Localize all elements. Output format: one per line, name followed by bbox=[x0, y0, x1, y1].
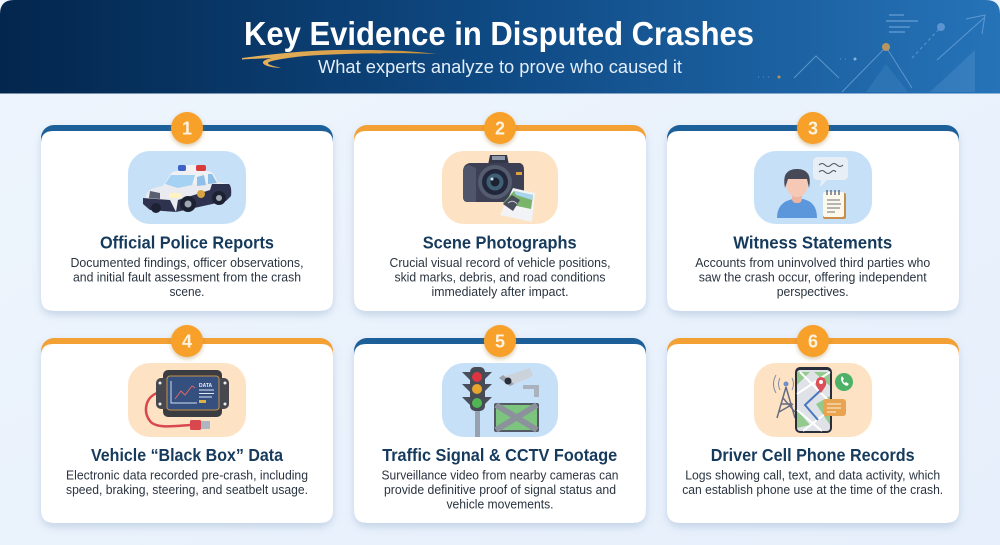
description bbox=[382, 469, 619, 512]
icon: camera and photo bbox=[442, 151, 558, 224]
description: and initial fault assessment from the crash bbox=[73, 270, 301, 284]
description: Accounts from uninvolved third parties who bbox=[695, 256, 930, 270]
description bbox=[695, 256, 930, 299]
icon: witness with speech bubble bbox=[754, 151, 872, 224]
title: Key Evidence in Disputed Crashes bbox=[244, 15, 754, 52]
number badge 5 bbox=[484, 325, 516, 357]
number badge 6: 6 bbox=[808, 332, 818, 352]
header decoration: rising chart bbox=[758, 15, 985, 92]
description: Surveillance video from nearby cameras can bbox=[382, 469, 619, 483]
description: Crucial visual record of vehicle positions, bbox=[390, 256, 610, 270]
number badge 2: 2 bbox=[495, 118, 505, 138]
description: speed, braking, steering, and seatbelt usage. bbox=[66, 483, 308, 497]
icon: black box device with cable bbox=[128, 363, 246, 437]
panel: vehicle black box data bbox=[41, 325, 333, 523]
panel: official police reports bbox=[41, 112, 333, 311]
subtitle: What experts analyze to prove who caused it bbox=[318, 57, 682, 77]
description: can establish phone use at the time of the crash. bbox=[682, 483, 943, 497]
icon: traffic light, camera, intersection map bbox=[442, 363, 558, 437]
heading: Traffic Signal & CCTV Footage bbox=[382, 445, 617, 465]
description: Electronic data recorded pre-crash, including bbox=[66, 469, 308, 483]
heading: Vehicle “Black Box” Data bbox=[91, 445, 283, 465]
description: perspectives. bbox=[777, 285, 849, 299]
number badge 5: 5 bbox=[495, 332, 505, 352]
icon: phone map, tower, messages bbox=[754, 363, 872, 437]
panel: witness statements bbox=[667, 112, 959, 311]
number badge 3: 3 bbox=[808, 118, 818, 138]
decorative swoosh bbox=[242, 50, 437, 68]
icon: black box device with cable: DATA bbox=[199, 383, 213, 389]
panel: scene photographs bbox=[354, 112, 646, 311]
header banner bbox=[0, 0, 1000, 94]
number badge 4 bbox=[171, 325, 203, 357]
panel: driver cell phone records bbox=[667, 325, 959, 523]
description: Documented findings, officer observations, bbox=[70, 256, 304, 270]
heading: Witness Statements bbox=[733, 232, 892, 252]
description: immediately after impact. bbox=[432, 285, 568, 299]
heading: Driver Cell Phone Records bbox=[711, 445, 915, 465]
panel: traffic signal and cctv footage bbox=[354, 325, 646, 523]
description bbox=[66, 469, 308, 497]
description: provide definitive proof of signal status and bbox=[384, 483, 616, 497]
number badge 2 bbox=[484, 112, 516, 144]
number badge 4: 4 bbox=[182, 332, 192, 352]
description: scene. bbox=[170, 285, 204, 299]
description: saw the crash occur, offering independent bbox=[699, 270, 927, 284]
description: Logs showing call, text, and data activity, which bbox=[685, 469, 940, 483]
heading: Scene Photographs bbox=[423, 232, 577, 252]
description: skid marks, debris, and road conditions bbox=[394, 270, 606, 284]
number badge 1 bbox=[171, 112, 203, 144]
number badge 3 bbox=[797, 112, 829, 144]
description bbox=[682, 469, 943, 497]
number badge 1: 1 bbox=[182, 118, 192, 138]
description bbox=[390, 256, 610, 299]
description: vehicle movements. bbox=[446, 498, 554, 512]
description bbox=[70, 256, 304, 299]
heading: Official Police Reports bbox=[100, 232, 274, 252]
icon: police car bbox=[128, 151, 246, 224]
number badge 6 bbox=[797, 325, 829, 357]
